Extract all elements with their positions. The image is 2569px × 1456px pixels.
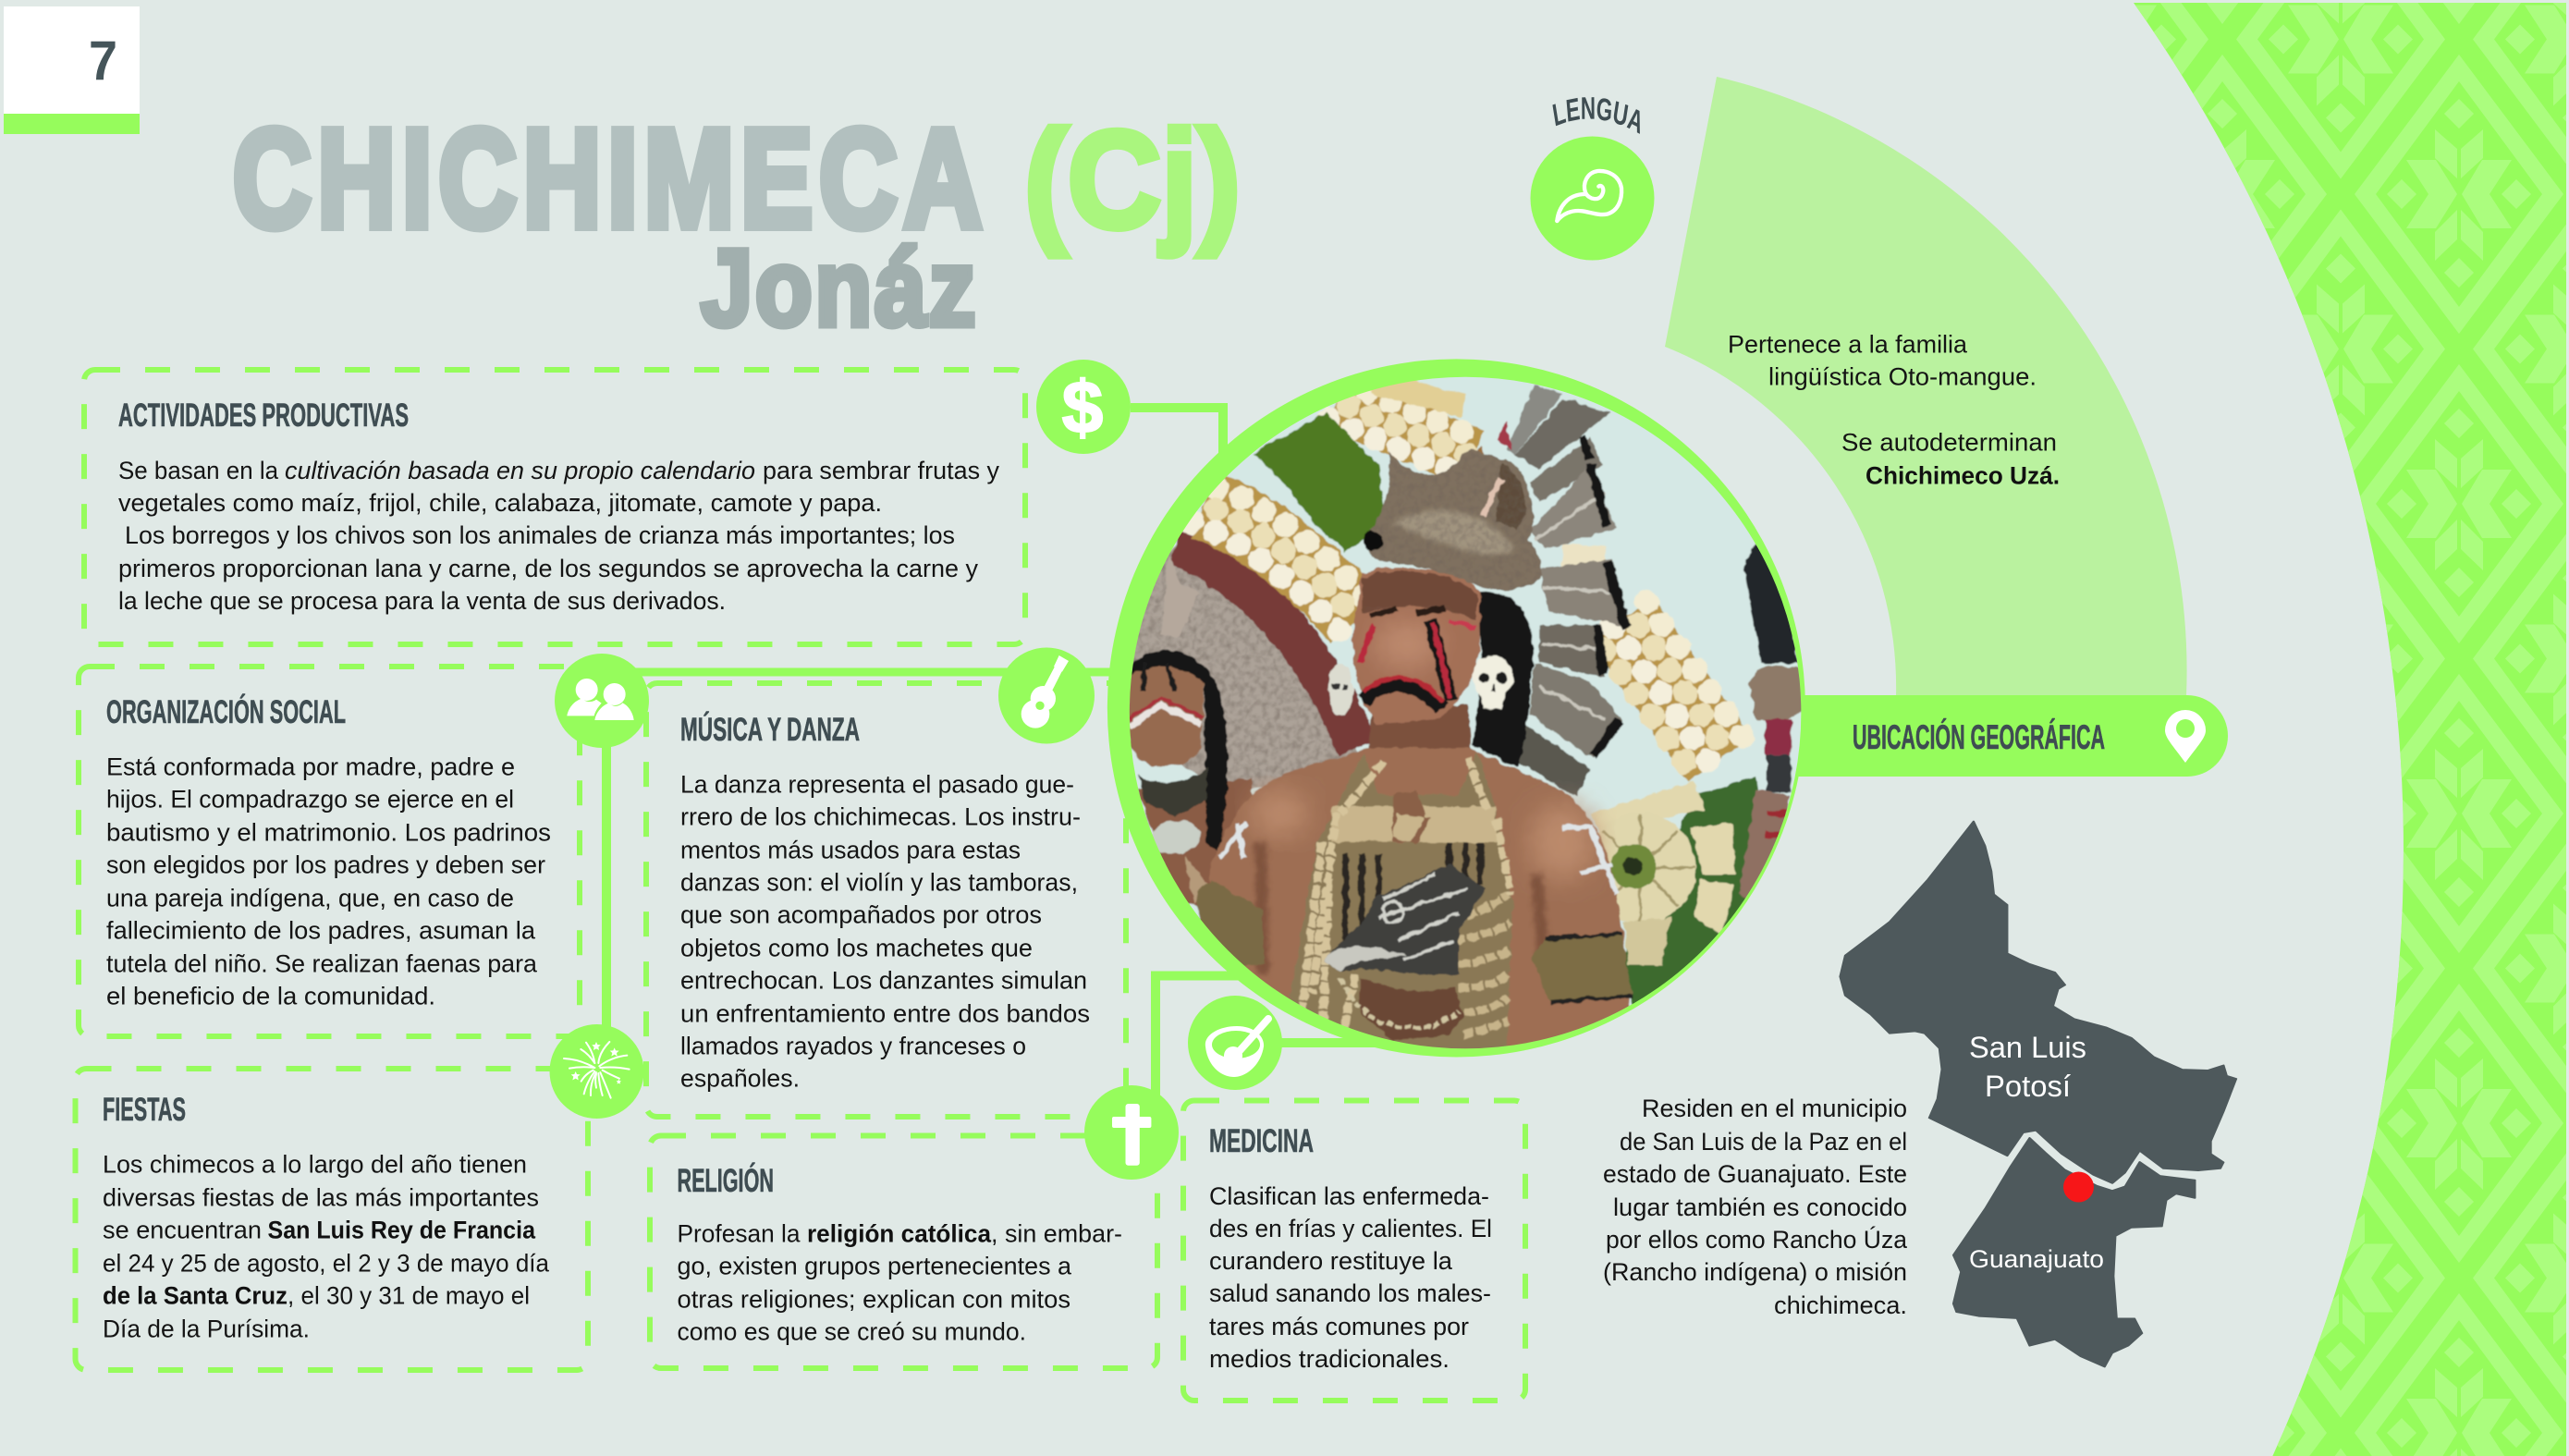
title: (Cj) xyxy=(1024,102,1241,257)
panel: medicina: tares más comunes por xyxy=(1209,1313,1469,1340)
panel: música y danza: rrero de los chichimecas. Los instru- xyxy=(680,802,1081,830)
panel: organización social: hijos. El compadrazgo se ejerce en el xyxy=(106,786,514,814)
panel: fiestas: Los chimecos a lo largo del año tienen xyxy=(103,1150,527,1178)
panel: lengua sector: lingüística Oto-mangue. xyxy=(1768,362,2037,390)
panel: religión: go, existen grupos pertenecientes a xyxy=(677,1252,1072,1279)
panel: fiestas: Día de la Purísima. xyxy=(103,1315,310,1342)
map: San Luis Potosí y Guanajuato: Guanajuato xyxy=(1969,1245,2104,1273)
icon: lengua xyxy=(1531,137,1655,261)
panel: religión: RELIGIÓN xyxy=(677,1162,774,1199)
icon: guitar xyxy=(998,647,1095,743)
text: residencia: lugar también es conocido xyxy=(1613,1193,1907,1221)
panel: medicina: Clasifican las enfermeda- xyxy=(1209,1182,1489,1210)
panel: actividades productivas: ACTIVIDADES PRODUCTIVAS xyxy=(118,398,409,434)
panel: actividades productivas: para sembrar frutas y xyxy=(763,457,999,484)
icon: fireworks xyxy=(549,1024,643,1119)
panel: música y danza: españoles. xyxy=(680,1065,800,1093)
title xyxy=(233,100,1241,349)
panel: religión: religión católica xyxy=(807,1220,992,1248)
panel: lengua sector: Chichimeco Uzá. xyxy=(1866,462,2060,490)
panel: actividades productivas: Se basan en la xyxy=(118,457,279,484)
panel: medicina: curandero restituye la xyxy=(1209,1247,1453,1275)
map: San Luis Potosí y Guanajuato xyxy=(1840,821,2236,1367)
icon: people xyxy=(555,654,649,748)
panel: lengua sector: Pertenece a la familia xyxy=(1728,331,1968,359)
panel: organización social: una pareja indígena, que, en caso de xyxy=(106,884,514,912)
photo: danzante chichimeca xyxy=(1107,359,1817,1069)
icon: productive activities dollar xyxy=(1036,360,1131,454)
panel: música y danza: objetos como los machetes que xyxy=(680,934,1033,961)
panel: fiestas: diversas fiestas de las más importantes xyxy=(103,1183,539,1211)
panel: organización social: Está conformada por madre, padre e xyxy=(106,752,515,780)
panel: organización social: tutela del niño. Se realizan faenas para xyxy=(106,950,538,978)
panel: fiestas: San Luis Rey de Francia xyxy=(268,1217,536,1244)
icon: mortar and pestle xyxy=(1188,996,1282,1090)
map: San Luis Potosí y Guanajuato: San Luis xyxy=(1969,1031,2086,1064)
banner: ubicación geográfica: UBICACIÓN GEOGRÁFICA xyxy=(1853,717,2105,756)
panel: actividades productivas: primeros proporcionan lana y carne, de los segundos se aprovecha la carne y xyxy=(118,555,978,582)
panel: religión xyxy=(650,1135,1157,1368)
icon: cross xyxy=(1084,1085,1179,1180)
panel: organización social: ORGANIZACIÓN SOCIAL xyxy=(106,693,346,730)
panel: música y danza: MÚSICA Y DANZA xyxy=(680,711,860,748)
icon: productive activities dollar: $ xyxy=(1062,366,1103,448)
page number tab: 7 xyxy=(89,30,117,92)
connector lines xyxy=(606,408,1396,1105)
panel: lengua sector: Se autodeterminan xyxy=(1841,429,2057,457)
text: residencia: de San Luis de la Paz en el xyxy=(1620,1128,1907,1156)
panel: religión: Profesan la xyxy=(677,1220,801,1248)
panel: medicina: medios tradicionales. xyxy=(1209,1345,1450,1373)
text: residencia: chichimeca. xyxy=(1774,1291,1907,1319)
panel: fiestas: el 24 y 25 de agosto, el 2 y 3 de mayo día xyxy=(103,1250,550,1278)
title: Jonáz xyxy=(701,227,978,349)
panel: actividades productivas: vegetales como maíz, frijol, chile, calabaza, jitomate, camote y papa. xyxy=(118,489,882,517)
text: residencia: estado de Guanajuato. Este xyxy=(1603,1160,1907,1188)
heading: lengua xyxy=(1552,97,1640,134)
panel: organización social: fallecimiento de los padres, asuman la xyxy=(106,917,536,945)
panel: música y danza: un enfrentamiento entre dos bandos xyxy=(680,1000,1090,1028)
panel: religión: como es que se creó su mundo. xyxy=(677,1318,1026,1346)
panel: música y danza: mentos más usados para estas xyxy=(680,836,1021,863)
panel: fiestas xyxy=(76,1069,588,1370)
heading: lengua: LENGUA xyxy=(1552,97,1640,134)
panel: fiestas: se encuentran xyxy=(103,1217,262,1244)
panel: fiestas: , el 30 y 31 de mayo el xyxy=(287,1281,530,1309)
panel: música y danza: danzas son: el violín y las tamboras, xyxy=(680,869,1078,897)
panel: fiestas: de la Santa Cruz xyxy=(103,1281,287,1309)
panel: música y danza: que son acompañados por otros xyxy=(680,900,1042,928)
banner: ubicación geográfica xyxy=(1756,695,2228,777)
panel: actividades productivas: la leche que se procesa para la venta de sus derivados. xyxy=(118,587,726,615)
panel: actividades productivas xyxy=(84,370,1025,644)
text: residencia: Residen en el municipio xyxy=(1642,1095,1907,1122)
panel: medicina: MEDICINA xyxy=(1209,1123,1314,1159)
title: CHICHIMECA xyxy=(233,100,988,256)
panel: actividades productivas: cultivación basada en su propio calendario xyxy=(285,457,755,484)
panel: medicina: salud sanando los males- xyxy=(1209,1279,1491,1307)
panel: música y danza: llamados rayados y franceses o xyxy=(680,1032,1026,1059)
text: residencia: por ellos como Rancho Úza xyxy=(1606,1225,1908,1254)
page number tab xyxy=(4,6,140,134)
text: residencia xyxy=(1603,1095,1908,1319)
panel: religión: otras religiones; explican con mitos xyxy=(677,1285,1070,1313)
panel: música y danza: La danza representa el pasado gue- xyxy=(680,771,1074,799)
panel: música y danza xyxy=(646,683,1126,1117)
decorative patterned band xyxy=(2134,3,2566,1456)
text: residencia: (Rancho indígena) o misión xyxy=(1603,1258,1907,1286)
panel: actividades productivas: Los borregos y los chivos son los animales de crianza más importantes; los xyxy=(125,521,955,549)
panel: medicina xyxy=(1183,1100,1525,1401)
panel: organización social: son elegidos por los padres y deben ser xyxy=(106,850,545,878)
panel: lengua sector xyxy=(1665,77,2187,696)
panel: organización social xyxy=(79,667,580,1036)
panel: religión: , sin embar- xyxy=(991,1220,1122,1248)
panel: organización social: bautismo y el matrimonio. Los padrinos xyxy=(106,819,551,847)
panel: fiestas: FIESTAS xyxy=(103,1092,186,1128)
panel: organización social: el beneficio de la comunidad. xyxy=(106,982,435,1009)
map: San Luis Potosí y Guanajuato: Potosí xyxy=(1985,1070,2071,1103)
panel: medicina: des en frías y calientes. El xyxy=(1209,1215,1492,1242)
panel: música y danza: entrechocan. Los danzantes simulan xyxy=(680,967,1087,995)
